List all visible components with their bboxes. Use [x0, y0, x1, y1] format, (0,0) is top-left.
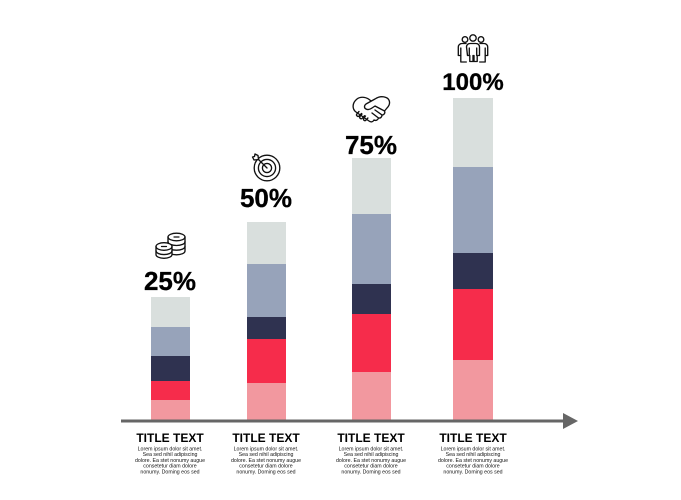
- label block: column 2: consetetur diam dolore: [239, 464, 293, 470]
- percentage: 75%: 75%: [345, 130, 397, 160]
- label block: column 1: TITLE TEXT: [136, 431, 204, 445]
- label block: column 2: Lorem ipsum dolor sit amet.: [234, 446, 298, 452]
- label block: column 1: Lorem ipsum dolor sit amet.: [138, 446, 202, 452]
- bar: 100% stacked column: [453, 98, 493, 420]
- icon: group of people: [458, 35, 488, 62]
- label block: column 4: nonumy. Doming eos sed: [443, 469, 503, 475]
- percentage: 50%: 50%: [240, 183, 292, 213]
- label block: column 2: nonumy. Doming eos sed: [236, 469, 296, 475]
- label block: column 1: Sea sed nihil adipiscing: [143, 452, 198, 458]
- label block: column 4: TITLE TEXT: [439, 431, 507, 445]
- label block: column 4: Sea sed nihil adipiscing: [446, 452, 501, 458]
- label block: column 3: Lorem ipsum dolor sit amet.: [339, 446, 403, 452]
- arrow: horizontal axis: [121, 413, 578, 429]
- percentage: 25%: 25%: [144, 266, 196, 296]
- bar: 25% stacked column: [151, 297, 190, 420]
- label block: column 2: [231, 431, 301, 475]
- icon: target: [252, 154, 280, 181]
- icon: handshake: [353, 97, 390, 122]
- percentage: 100%: 100%: [442, 69, 504, 96]
- label block: column 3: nonumy. Doming eos sed: [341, 469, 401, 475]
- icon: coins: [156, 233, 185, 258]
- label block: column 3: dolore. Ea stet nonumy augue: [336, 458, 406, 464]
- label block: column 2: dolore. Ea stet nonumy augue: [231, 458, 301, 464]
- label block: column 1: consetetur diam dolore: [143, 464, 197, 470]
- label block: column 4: Lorem ipsum dolor sit amet.: [441, 446, 505, 452]
- label block: column 1: dolore. Ea stet nonumy augue: [135, 458, 205, 464]
- bar: 75% stacked column: [352, 158, 391, 420]
- label block: column 3: [336, 431, 406, 475]
- label block: column 4: [438, 431, 508, 475]
- label block: column 3: consetetur diam dolore: [344, 464, 398, 470]
- bar: 50% stacked column: [247, 222, 286, 420]
- label block: column 4: dolore. Ea stet nonumy augue: [438, 458, 508, 464]
- label block: column 1: [135, 431, 205, 475]
- label block: column 2: TITLE TEXT: [232, 431, 300, 445]
- label block: column 4: consetetur diam dolore: [446, 464, 500, 470]
- label block: column 1: nonumy. Doming eos sed: [140, 469, 200, 475]
- label block: column 2: Sea sed nihil adipiscing: [239, 452, 294, 458]
- label block: column 3: TITLE TEXT: [337, 431, 405, 445]
- label block: column 3: Sea sed nihil adipiscing: [344, 452, 399, 458]
